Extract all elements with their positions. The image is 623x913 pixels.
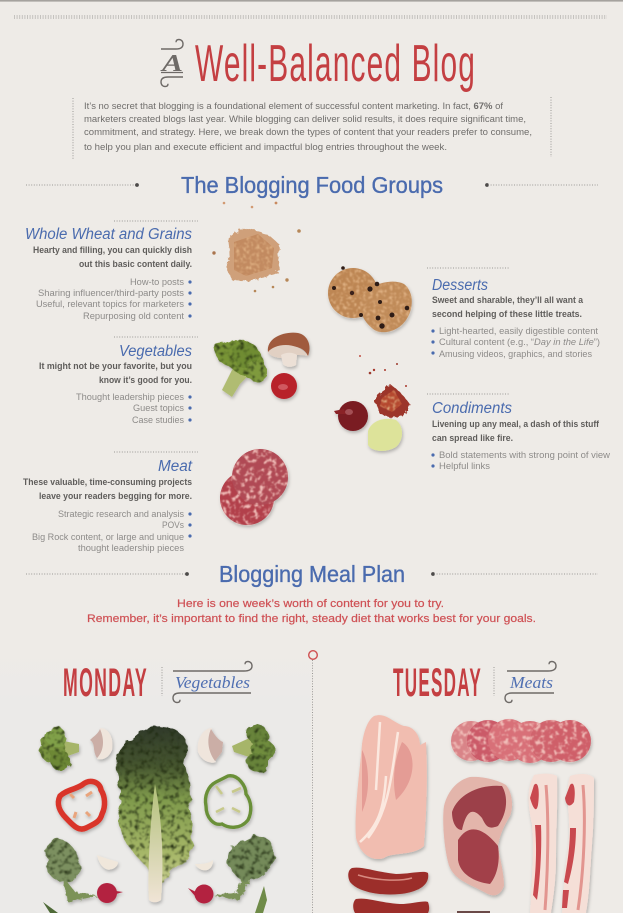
- icon: right radish with greens: [188, 835, 275, 904]
- icon: cookies: [328, 266, 412, 332]
- panel: vegetables: Guest topics: [133, 402, 184, 413]
- red intro text: Here is one week’s worth of content for you to try.: [177, 598, 444, 610]
- icon: left mushroom: [90, 728, 112, 759]
- panel: vegetables: It might not be your favorite, but you: [39, 361, 192, 372]
- panel: condiments: can spread like fire.: [432, 433, 513, 444]
- heading: The Blogging Food Groups: [26, 172, 598, 198]
- heading: Monday: MONDAY: [63, 661, 148, 705]
- panel: condiments: [427, 394, 610, 471]
- background tint behind Monday vegetables: [0, 650, 311, 913]
- panel: whole wheat and grains: Repurposing old content: [83, 310, 184, 321]
- panel: meat: Big Rock content, or large and unique: [32, 531, 184, 542]
- panel: whole wheat and grains: out this basic content daily.: [79, 259, 192, 270]
- panel: desserts: second helping of these little treats.: [432, 309, 582, 320]
- icon: grains and pasta: [212, 202, 301, 292]
- icon: partial dark item: [457, 911, 490, 913]
- panel: whole wheat and grains: Whole Wheat and Grains: [25, 226, 192, 243]
- title: [159, 35, 476, 93]
- panel: vegetables: Thought leadership pieces: [76, 391, 184, 402]
- intro text block: marketers created blogs last year. While blogging can deliver solid results, it does require significant time,: [84, 114, 526, 125]
- heading: The Blogging Food Groups: The Blogging Food Groups: [181, 172, 443, 198]
- panel: whole wheat and grains: Sharing influencer/third-party posts: [38, 287, 184, 298]
- panel: meat: These valuable, time-consuming projects: [23, 477, 192, 488]
- icon: left radish with greens: [46, 839, 123, 903]
- panel: meat: POVs: [162, 519, 184, 530]
- intro text block: commitment, and strategy. Here, we break down the types of content that your readers prefer to consume,: [84, 127, 532, 138]
- icon: red pepper ring: [58, 781, 105, 829]
- panel: desserts: Amusing videos, graphics, and stories: [439, 348, 592, 359]
- icon: condiments: [334, 355, 410, 451]
- panel: condiments: Livening up any meal, a dash of this stuff: [432, 419, 600, 430]
- red intro text: Remember, it’s important to find the right, steady diet that works best for your goals.: [87, 613, 536, 625]
- intro text block: to help you plan and execute efficient and impactful blog entries throughout the week.: [84, 142, 447, 153]
- heading: Tuesday: Meats: [509, 673, 553, 692]
- heading: Monday: Vegetables: [175, 673, 250, 692]
- icon: green pepper ring: [205, 776, 251, 827]
- icon: bacon strips: [528, 774, 594, 913]
- icon: broccoli, mushroom and tomato: [214, 333, 310, 399]
- icon: steak: [443, 777, 512, 895]
- panel: vegetables: know it’s good for you.: [99, 375, 192, 386]
- panel: desserts: [427, 268, 600, 359]
- panel: desserts: Light-hearted, easily digestible content: [439, 325, 598, 336]
- heading: Tuesday: TUESDAY: [393, 661, 482, 705]
- panel: whole wheat and grains: How-to posts: [130, 276, 184, 287]
- panel: meat: leave your readers begging for more.: [39, 491, 192, 502]
- panel: whole wheat and grains: Useful, relevant topics for marketers: [36, 298, 184, 309]
- icon: right mushroom: [198, 728, 223, 763]
- panel: whole wheat and grains: Hearty and filling, you can quickly dish: [33, 245, 192, 256]
- panel: condiments: Bold statements with strong point of view: [439, 449, 610, 460]
- icon: sausages: [348, 868, 429, 913]
- icon: garlic cloves: [97, 855, 213, 870]
- panel: condiments: Condiments: [432, 400, 512, 417]
- illustration: Monday vegetables: [39, 725, 275, 913]
- panel: vegetables: Vegetables: [119, 343, 192, 360]
- icon: ornamental letter A: [159, 40, 183, 86]
- panel: meat: Strategic research and analysis: [58, 508, 184, 519]
- icon: prosciutto: [356, 715, 427, 859]
- icon: left broccoli: [39, 727, 79, 770]
- panel: vegetables: Case studies: [132, 414, 184, 425]
- icon: green beans: [43, 886, 267, 913]
- panel: desserts: Cultural content (e.g., “Day in the Life”): [439, 336, 600, 347]
- intro text block: [73, 97, 551, 159]
- illustration: Tuesday meats: [348, 715, 594, 913]
- intro text block: It’s no secret that blogging is a foundational element of successful content marketing. In fact, 67% of: [84, 101, 503, 112]
- panel: desserts: Desserts: [432, 277, 488, 294]
- panel: desserts: Sweet and sharable, they’ll all want a: [432, 295, 584, 306]
- heading: Blogging Meal Plan: Blogging Meal Plan: [219, 561, 405, 587]
- icon: salami row: [451, 719, 591, 763]
- panel: condiments: Helpful links: [439, 460, 490, 471]
- red intro text: [87, 598, 536, 625]
- panel: whole wheat and grains: [25, 221, 198, 321]
- heading: Blogging Meal Plan: [26, 561, 598, 587]
- panel: meat: Meat: [158, 458, 193, 475]
- panel: meat: [23, 452, 198, 553]
- timeline divider: [309, 651, 317, 913]
- icon: right broccoli: [232, 725, 274, 773]
- panel: vegetables: [39, 337, 198, 425]
- icon: ornamental letter A: A: [159, 51, 183, 77]
- panel: meat: thought leadership pieces: [78, 542, 184, 553]
- icon: lettuce: [116, 726, 193, 902]
- icon: salami slices: [220, 449, 288, 525]
